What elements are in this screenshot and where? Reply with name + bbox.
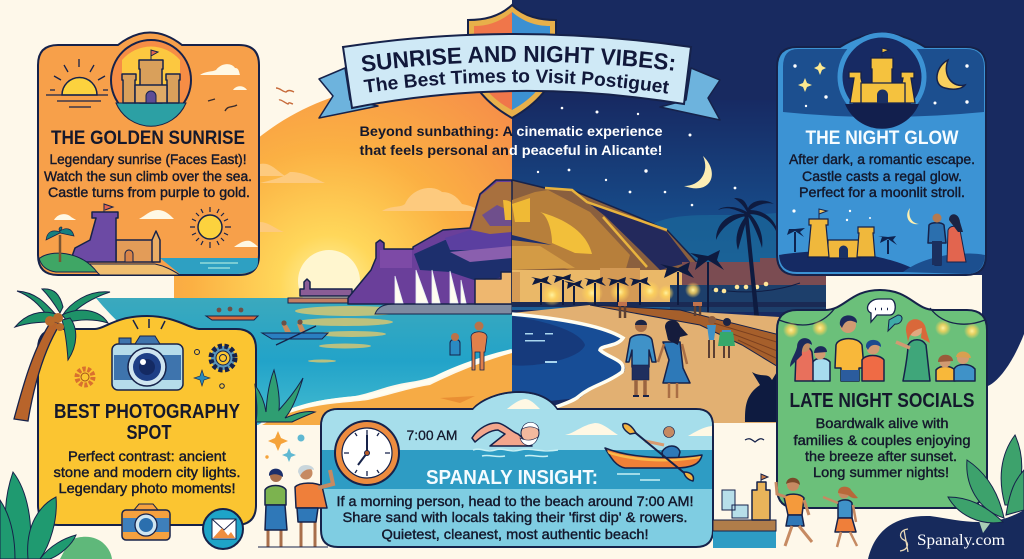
moon: [684, 156, 712, 188]
birds: [208, 99, 237, 111]
brand name: Spanaly.com: [917, 532, 1006, 549]
sparkles near locals: [265, 431, 304, 462]
body text: If a morning person, head to the beach around 7:00 AM!: [336, 493, 694, 509]
body text: Perfect contrast: ancient: [68, 448, 226, 464]
cloud: [382, 188, 478, 211]
children playing: [776, 478, 858, 547]
panel: the night glow: [777, 34, 986, 275]
heading: THE GOLDEN SUNRISE: [51, 128, 245, 149]
heading: SPANALY INSIGHT:: [426, 467, 598, 489]
body text: stone and modern city lights.: [54, 464, 240, 480]
time label: 7:00 AM: [406, 427, 458, 443]
clouds: [54, 64, 258, 247]
icon: kayaker: [605, 423, 702, 481]
speech bubbles: [868, 299, 902, 331]
body text: the breeze after sunset.: [805, 448, 957, 464]
central scene: sunrise side: [96, 80, 512, 425]
sand and surf: [512, 305, 826, 423]
icon: gears and sparkles: [77, 346, 235, 388]
string lights on promenade: [712, 283, 800, 292]
stars in panel: [793, 62, 969, 107]
icon: swimmer: [472, 422, 558, 457]
heading: THE NIGHT GLOW: [806, 128, 959, 149]
scene: castle and couple: [779, 208, 985, 274]
body text: Boardwalk alive with: [816, 415, 948, 431]
icon: castle medallion: [840, 35, 924, 129]
body text: Perfect for a moonlit stroll.: [799, 184, 965, 200]
heading: LATE NIGHT SOCIALS: [790, 390, 974, 412]
body text: [54, 448, 240, 496]
big palm: [716, 198, 778, 325]
body text: After dark, a romantic escape.: [789, 151, 975, 167]
heading: BEST PHOTOGRAPHY: [54, 401, 241, 423]
night palms: [541, 262, 708, 315]
panel: best photography spot: [38, 316, 256, 549]
birds in sky: [276, 88, 294, 104]
body text: Watch the sun climb over the sea.: [44, 168, 252, 184]
ribbon tails: [319, 68, 720, 120]
sun: [298, 250, 360, 312]
sea: [96, 298, 512, 425]
swimmers: [450, 339, 460, 355]
string lights: [779, 308, 985, 339]
lighthouse and pier: [713, 439, 776, 548]
body text: Legendary photo moments!: [58, 480, 236, 496]
body text: Castle casts a regal glow.: [802, 168, 962, 184]
stars: [537, 107, 736, 206]
title banner: [318, 33, 721, 121]
body text: [794, 415, 970, 480]
purple castle hill: [348, 180, 512, 304]
icon: logo mark: [900, 529, 908, 552]
heading: [54, 401, 241, 444]
icon: rising sun: [46, 59, 108, 107]
icon: radiant sun: [190, 207, 231, 248]
strolling couple: [626, 320, 690, 398]
subtitle: [360, 123, 663, 158]
icon: camera: [112, 319, 183, 390]
boardwalk: [590, 305, 780, 368]
body text: Quietest, cleanest, most authentic beach!: [382, 526, 648, 542]
panel: late night socials: [777, 290, 987, 508]
heading: SPOT: [126, 422, 172, 444]
title line 2: The Best Times to Visit Postiguet: [363, 69, 670, 94]
logo corner: [868, 510, 1024, 559]
banner body: [343, 34, 691, 108]
locals waving: [258, 465, 333, 547]
body text: Legendary sunrise (Faces East)!: [50, 151, 246, 167]
rowers near: [262, 333, 328, 339]
scene: castle at dawn: [39, 204, 258, 275]
icon: crescent moon: [937, 60, 965, 89]
body text: Castle turns from purple to gold.: [48, 184, 250, 200]
pastel buildings: [475, 272, 512, 304]
shield emblem: [468, 5, 556, 118]
central scene: night side: [512, 100, 826, 423]
body text: families & couples enjoying: [794, 432, 970, 448]
night sea: [512, 314, 623, 402]
bottom right leaves: [948, 435, 1024, 523]
couple in distance: [618, 302, 735, 358]
waterfront city: [512, 270, 682, 304]
family group: [790, 315, 975, 381]
night plant: [745, 370, 778, 422]
small fort and pier: [300, 279, 352, 296]
icon: small camera: [122, 504, 170, 540]
subtitle: that feels personal an d peaceful in Alicante!: [360, 142, 662, 158]
panel: spanaly insight: [321, 392, 713, 547]
body text: [789, 151, 975, 200]
icon: photo badge: [203, 509, 243, 549]
body text: [44, 151, 252, 200]
tropical palm tree: [14, 289, 110, 421]
bottom left leaves: [0, 472, 112, 559]
rowers far: [206, 316, 258, 320]
body text: [336, 493, 694, 542]
clouds: [507, 399, 712, 436]
panel: the golden sunrise: [38, 32, 259, 275]
body text: Long summer nights!: [813, 464, 949, 480]
sailboats: [395, 270, 466, 303]
icon: castle medallion: [111, 40, 191, 126]
plant beside photo panel: [255, 370, 315, 422]
illuminated hill: [512, 180, 705, 304]
icon: clock: [335, 421, 399, 485]
subtitle: Beyond sunbathing: A cinematic experience: [360, 123, 663, 139]
body text: Share sand with locals taking their 'first dip' & rowers.: [342, 509, 688, 525]
title line 1: SUNRISE AND NIGHT VIBES:: [362, 46, 674, 72]
